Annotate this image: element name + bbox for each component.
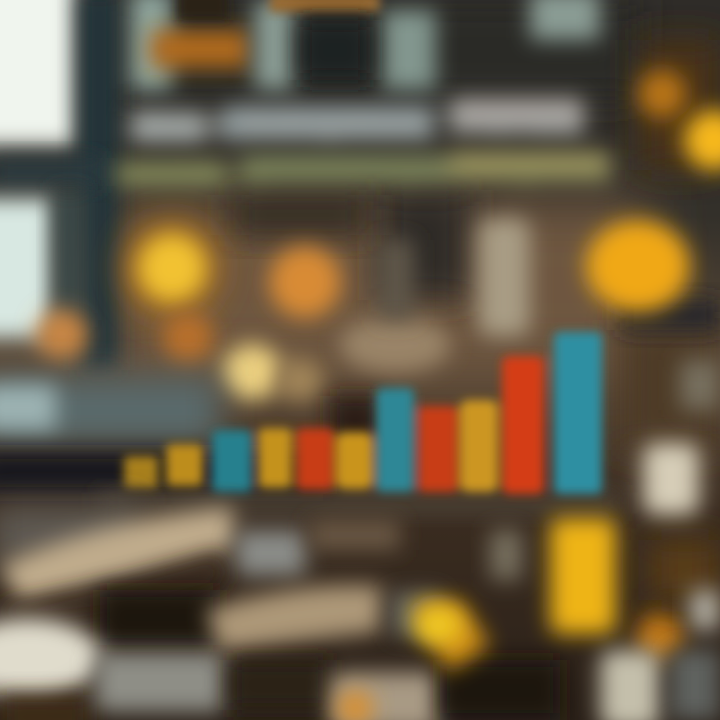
bar 10 [502, 356, 544, 494]
desk band [0, 376, 620, 514]
bar 9 [460, 400, 498, 492]
subtitle [116, 152, 610, 188]
bar chart [124, 332, 602, 494]
subtitle: Rising usage across key user segments [116, 161, 610, 188]
bar 3 [212, 430, 252, 492]
bar 8 [418, 406, 458, 492]
bar 11 [554, 332, 602, 494]
blurred room backdrop [110, 0, 720, 450]
yellow highlights, bottom right [412, 518, 720, 720]
bar 4 [258, 428, 292, 488]
bar 6 [336, 432, 373, 489]
bar 5 [296, 428, 334, 490]
books and papers, bottom left [0, 505, 400, 720]
pale vase and centre objects [339, 218, 530, 373]
windows on the left [0, 0, 118, 370]
shelf items along the top [130, 0, 600, 90]
books and papers, bottom centre [206, 585, 560, 720]
glowing lights [36, 70, 720, 402]
bar 2 [166, 444, 203, 486]
mug, right [643, 443, 699, 515]
bar 7 [376, 388, 414, 492]
title: User Adoption Trends [132, 103, 584, 145]
bar 1 [124, 456, 158, 488]
